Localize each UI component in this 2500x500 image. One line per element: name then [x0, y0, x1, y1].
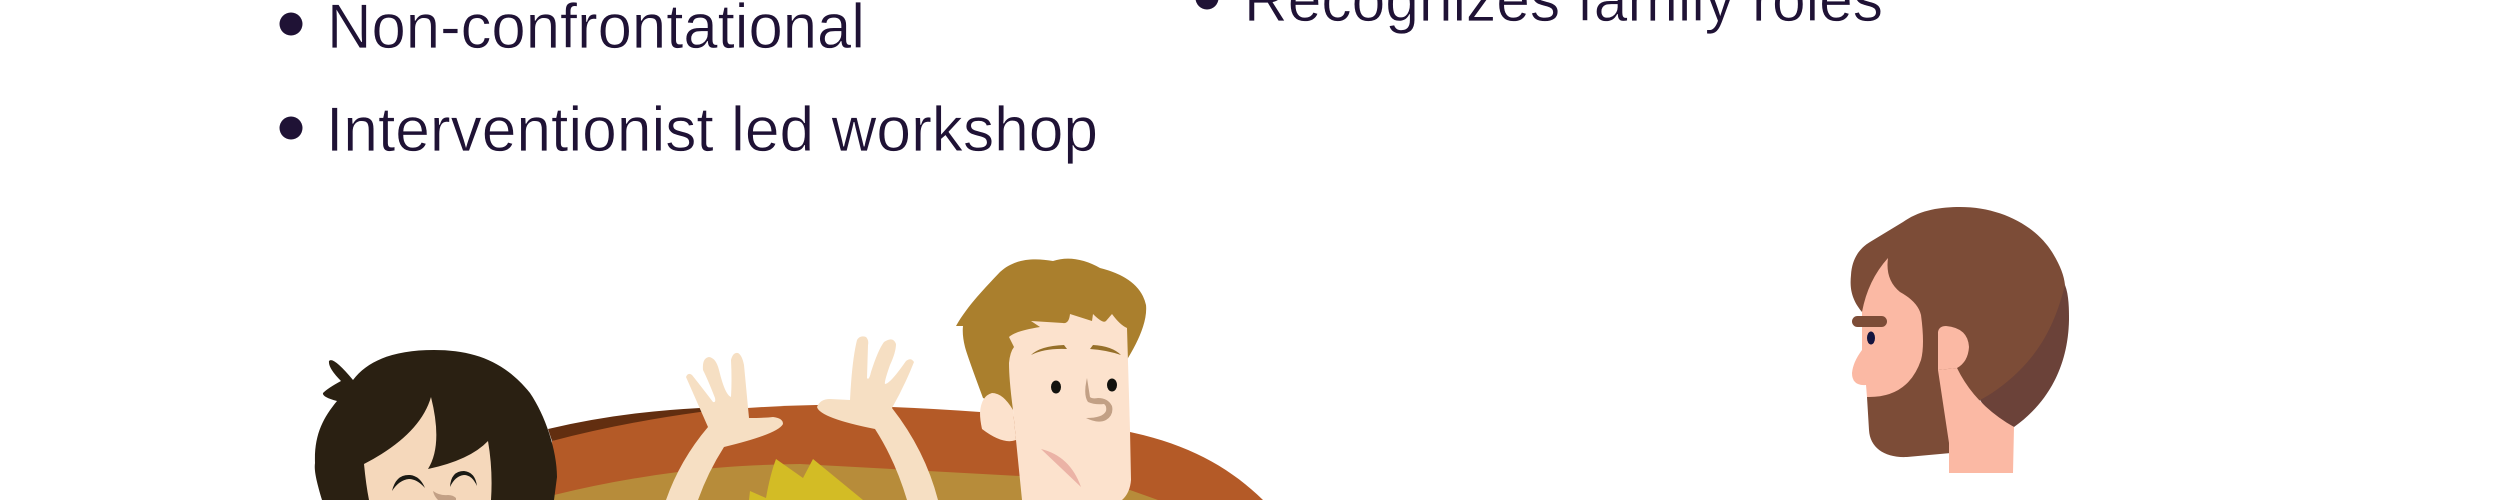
neck: [1938, 368, 2014, 473]
woman nose: [433, 491, 456, 500]
man ear: [980, 393, 1016, 441]
woman hair: [315, 350, 557, 500]
illustration: family group: [315, 259, 1263, 500]
woman eyes: [392, 471, 477, 491]
man face: [1009, 314, 1131, 500]
face skin: [1852, 258, 1923, 397]
couch back rim: [548, 408, 712, 441]
man eyebrows: [1031, 345, 1121, 355]
eyebrow: [1852, 316, 1887, 327]
man nose: [1085, 378, 1112, 422]
back hair shadow: [1980, 285, 2069, 427]
man eyes: [1051, 378, 1117, 394]
woman face: [364, 397, 492, 500]
right raised arm: [817, 336, 938, 500]
illustration: bearded man profile head: [1851, 207, 2069, 473]
man hair: [956, 259, 1146, 410]
couch back: [552, 405, 1263, 500]
couch seat: [554, 464, 1158, 500]
ear: [1938, 326, 1969, 370]
child yellow hair: [749, 459, 863, 500]
man mouth: [1041, 449, 1081, 487]
bullet item: Interventionist led workshop: Interventionist led workshop: [326, 95, 1098, 165]
left raised arm: [666, 353, 783, 500]
hair and beard: [1851, 207, 2065, 457]
eye: [1867, 332, 1875, 344]
